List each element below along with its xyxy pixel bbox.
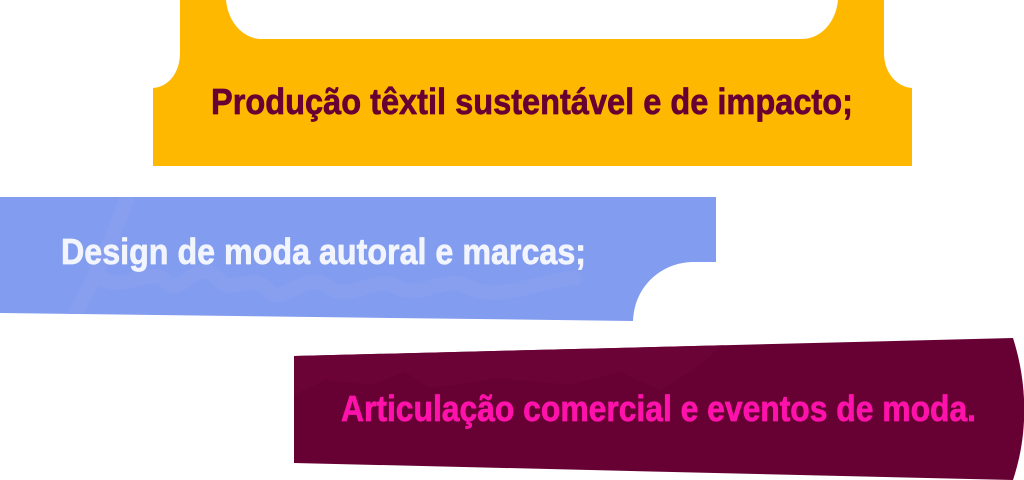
panel: articulação comercial (294, 338, 1024, 480)
maroon banner shape (294, 338, 1024, 480)
heading: design de moda: Design de moda autoral e marcas; (61, 231, 586, 272)
panel: produção têxtil (153, 0, 912, 166)
yellow banner shape (153, 0, 912, 166)
panel: design de moda (0, 195, 716, 321)
heading: produção têxtil: Produção têxtil sustentável e de impacto; (211, 81, 853, 122)
faint script watermark (68, 314, 83, 315)
faint texture watermark (294, 345, 724, 356)
blue banner shape (0, 197, 716, 321)
